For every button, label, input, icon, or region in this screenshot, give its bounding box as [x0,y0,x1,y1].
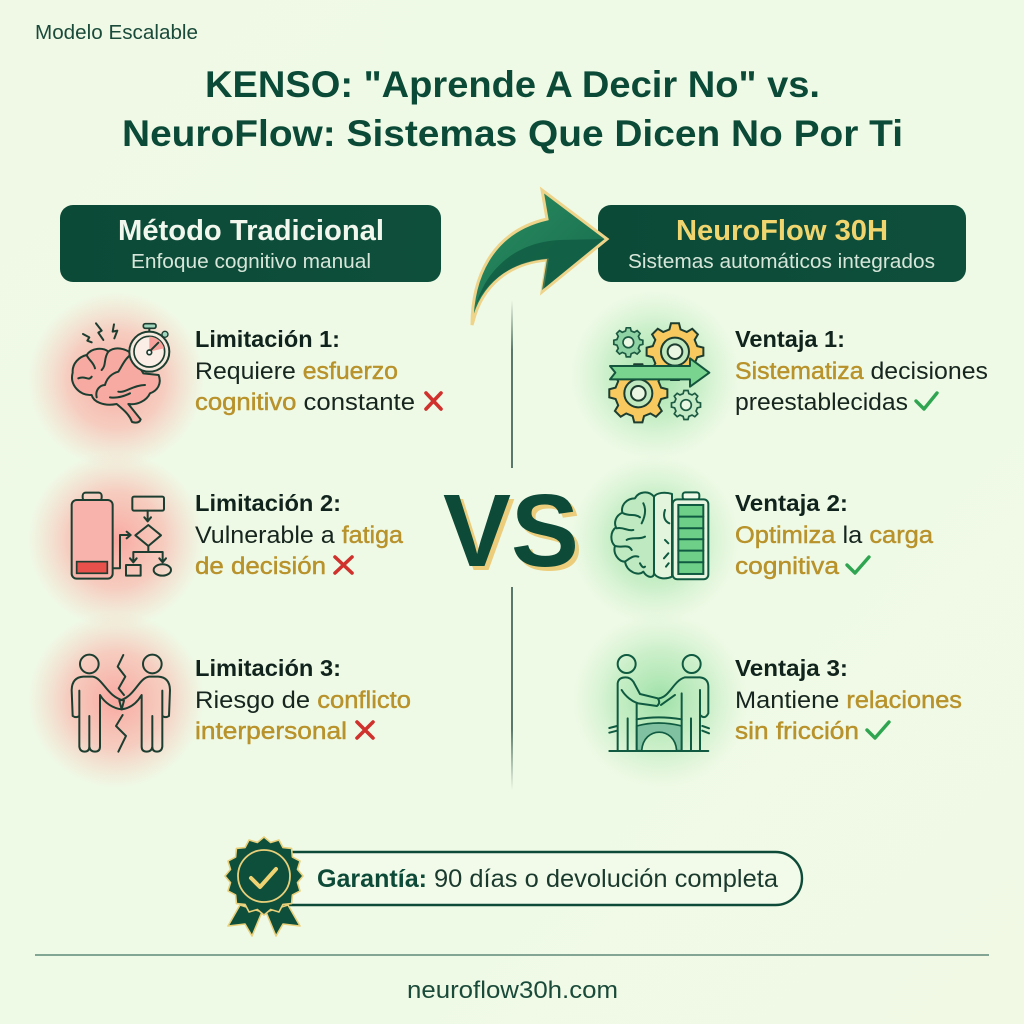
arrow: curved transition [472,190,607,325]
text: advantage 2: Ventaja 2: [735,490,848,516]
panel: left header: Enfoque cognitivo manual [131,251,371,273]
text: limitation 1: cognitivo constante [195,389,415,416]
icon: green check 2 [847,557,869,573]
text: limitation 2: Vulnerable a fatiga [195,522,404,549]
text: limitation 2: de decisión [195,553,326,580]
text: advantage 1: Sistematiza decisiones [735,358,988,385]
icon: red cross 2 [335,557,352,573]
guarantee pill [262,852,802,905]
text: advantage 3: Mantiene relaciones [735,687,962,714]
panel: right header: Sistemas automáticos integrados [628,251,935,273]
text: advantage 2: cognitiva [735,553,840,580]
text: advantage 3 [735,655,962,745]
title: KENSO: "Aprende A Decir No" vs. [205,64,820,105]
icon: low battery with flowchart [28,452,204,628]
icon: handshake over bridge [572,612,748,788]
text: advantage 2: Optimiza la carga [735,522,934,549]
icon: green check 3 [867,722,889,738]
text: advantage 1: preestablecidas [735,389,908,416]
title [122,64,903,154]
text: limitation 3: Limitación 3: [195,655,341,681]
panel: right header [598,205,966,282]
text: limitation 3: interpersonal [195,718,347,745]
text: limitation 2 [195,490,404,580]
divider: upper center line [511,300,513,468]
text: limitation 1: Requiere esfuerzo [195,358,398,385]
divider: footer rule [35,954,989,956]
text: limitation 2: Limitación 2: [195,490,341,516]
text: advantage 1: Ventaja 1: [735,326,845,352]
panel: right header: NeuroFlow 30H [676,215,888,247]
text: advantage 1 [735,326,988,416]
panel: left header: Método Tradicional [118,215,384,247]
icon: red cross 1 [426,393,441,409]
text: advantage 3: Ventaja 3: [735,655,848,681]
text: limitation 3 [195,655,411,745]
VS mark: VS [443,473,579,588]
text: advantage 2 [735,490,934,580]
icon: gears with arrow [570,290,740,460]
guarantee pill: 90 días o devolución completa [434,865,778,893]
label: Modelo Escalable: Modelo Escalable [35,22,198,44]
icon: broken relationship [28,612,204,788]
text: limitation 1 [195,326,415,416]
text: limitation 1: Limitación 1: [195,326,340,352]
icon: red cross 3 [357,722,373,738]
footer url: neuroflow30h.com [407,977,618,1004]
guarantee pill: Garantía: [317,865,427,893]
icon: brain with full battery [570,455,740,625]
text: advantage 3: sin fricción [735,718,859,745]
icon: brain with stopwatch [28,292,204,468]
icon: guarantee medal [225,837,303,936]
title: NeuroFlow: Sistemas Que Dicen No Por Ti [122,113,903,154]
icon: green check 1 [916,393,937,409]
panel: left header [60,205,441,282]
text: limitation 3: Riesgo de conflicto [195,687,411,714]
divider: lower center line [511,587,513,790]
VS mark: VS [447,477,583,592]
